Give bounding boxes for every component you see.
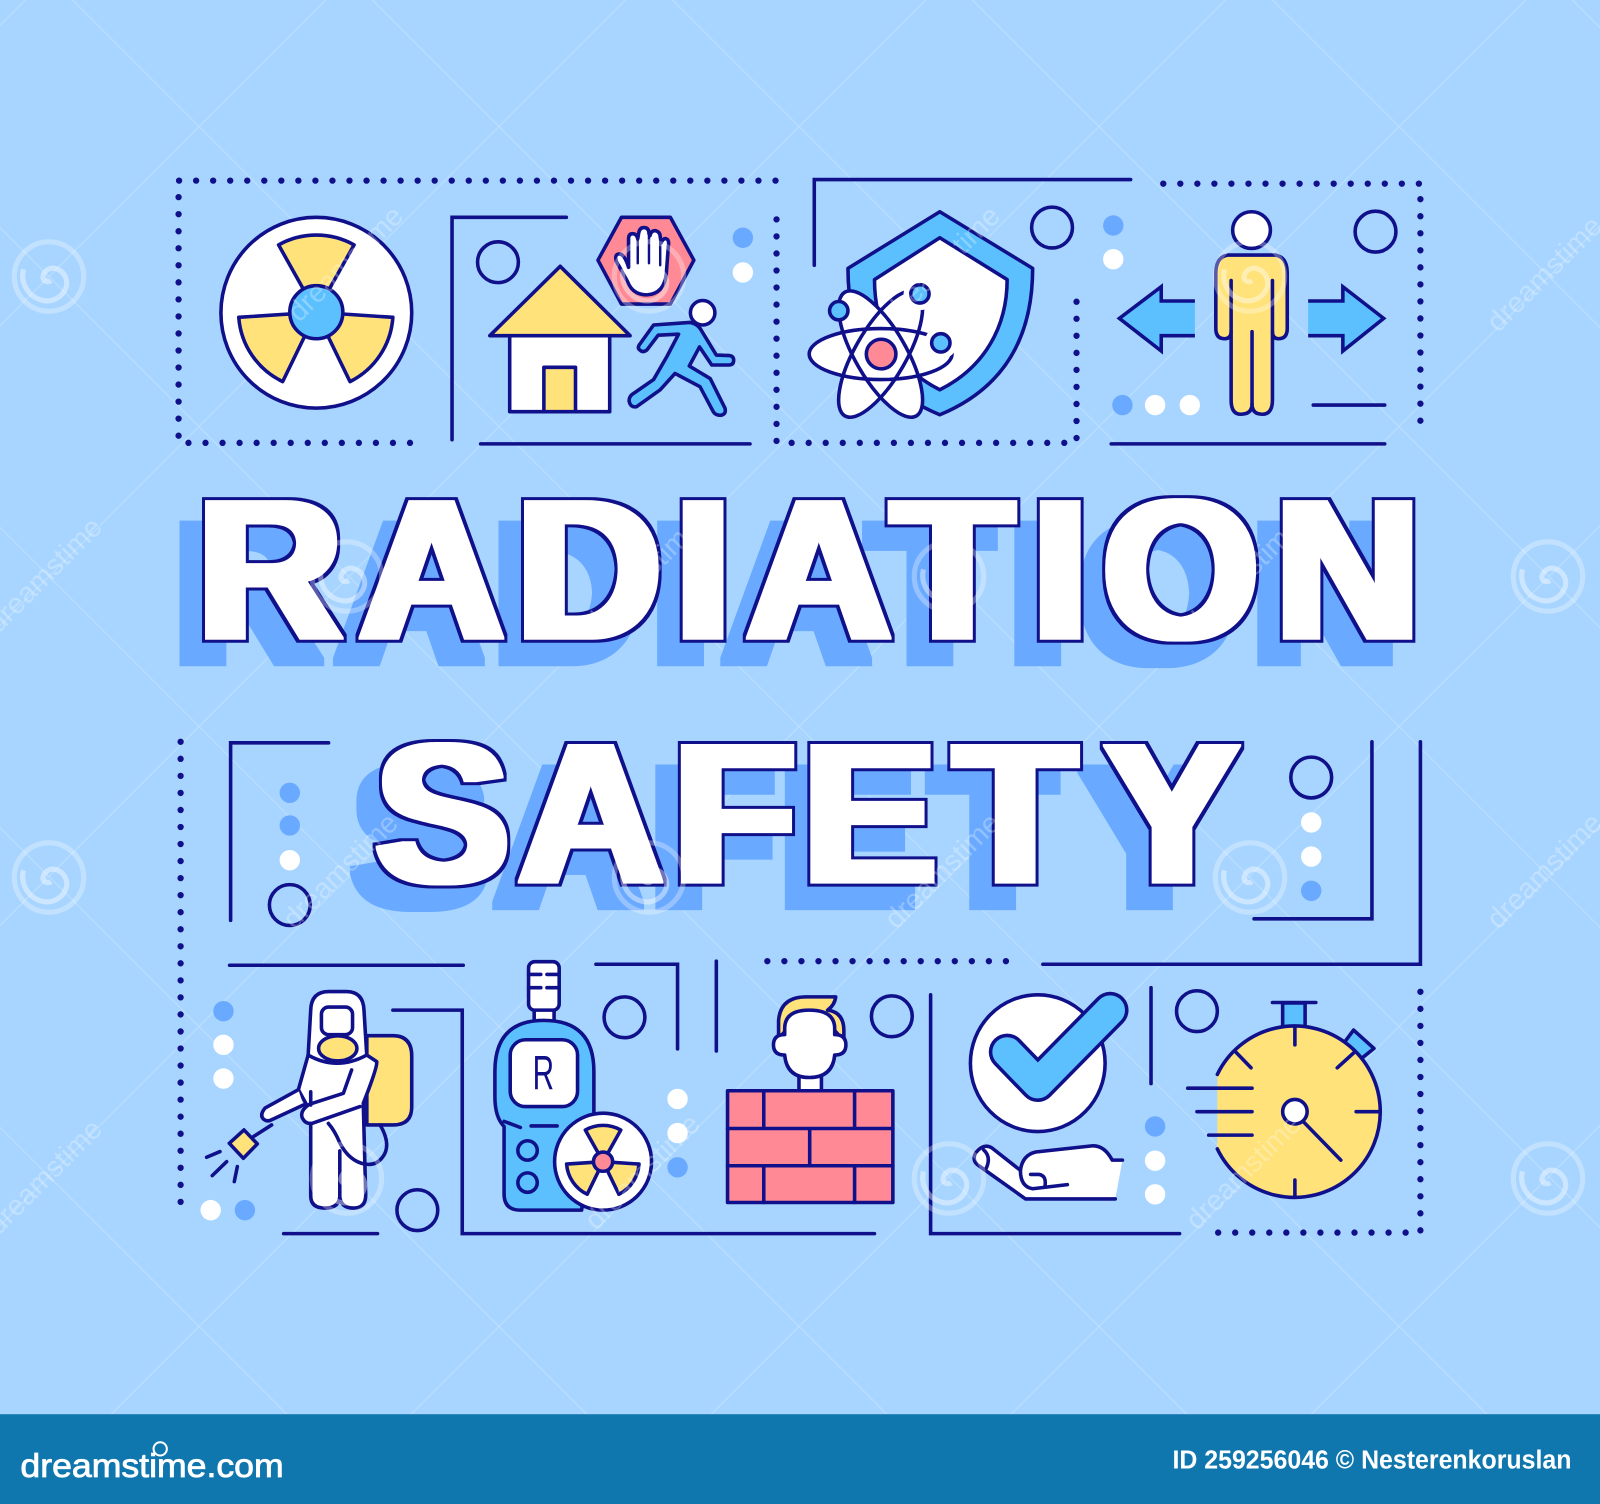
watermark: dreamstime bbox=[282, 200, 410, 328]
watermark: dreamstime bbox=[579, 511, 707, 639]
title: radiation: RADIATION bbox=[198, 459, 1420, 682]
footer logo: dreamstime.com bbox=[20, 1448, 284, 1485]
outline circles bbox=[269, 207, 1396, 1231]
watermark: dreamstime bbox=[1180, 1108, 1308, 1236]
house bbox=[490, 266, 630, 412]
icon: person with distance arrows bbox=[1119, 212, 1384, 414]
icon: radiation meter bbox=[495, 962, 652, 1210]
hand bbox=[974, 1146, 1122, 1199]
runner bbox=[629, 300, 734, 415]
icon: check mark over hand bbox=[970, 995, 1122, 1199]
watermark bbox=[0, 200, 1600, 1241]
icon: shield with atom bbox=[809, 212, 1033, 429]
watermark: dreamstime bbox=[277, 807, 405, 935]
watermark: dreamstime bbox=[1180, 511, 1308, 639]
right arrow bbox=[1308, 287, 1384, 351]
line brackets bbox=[230, 180, 1420, 1234]
watermark: dreamstime bbox=[579, 1108, 707, 1236]
atom bbox=[809, 278, 957, 429]
dotted frames bbox=[179, 181, 1420, 1233]
icon: stopwatch bbox=[1188, 1002, 1380, 1197]
icon: man behind brick wall bbox=[728, 997, 893, 1202]
stop sign bbox=[598, 217, 694, 304]
footer credit: ID 259256046 © Nesterenkoruslan bbox=[1172, 1444, 1571, 1474]
backpack bbox=[367, 1036, 412, 1125]
left arrow bbox=[1119, 287, 1195, 351]
title: safety: SAFETY bbox=[376, 703, 1239, 926]
figure bbox=[1216, 212, 1287, 414]
icon: hazmat suit worker spraying bbox=[207, 992, 412, 1208]
footer bar bbox=[0, 1414, 1600, 1504]
watermark: dreamstime bbox=[879, 807, 1007, 935]
accent dots bbox=[201, 215, 1321, 1220]
icon: house with stop sign and running person bbox=[490, 217, 734, 415]
suit bbox=[298, 992, 377, 1208]
spray wand bbox=[253, 1125, 272, 1137]
watermark: dreamstime bbox=[879, 200, 1007, 328]
meter letter: R bbox=[533, 1048, 554, 1101]
icon: radiation symbol bbox=[221, 217, 412, 408]
